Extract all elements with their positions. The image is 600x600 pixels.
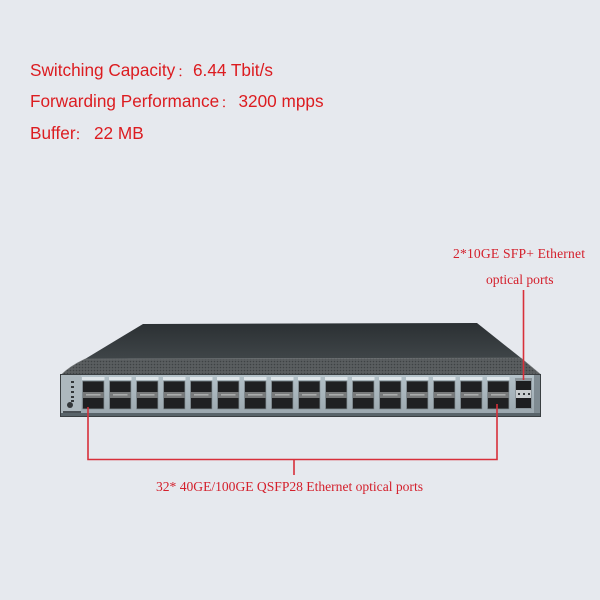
switch mesh vent strip — [61, 358, 540, 375]
spec: forwarding performance: Forwarding Performance — [30, 91, 219, 111]
right edge shading — [534, 375, 540, 416]
bracket line: QSFP28 ports leader — [88, 404, 497, 475]
callout: SFP+ ports label: 2*10GE SFP+ Ethernet — [453, 246, 585, 261]
callout: SFP+ ports label: optical ports — [486, 272, 554, 287]
bottom edge shading — [61, 413, 540, 416]
arrow line: SFP+ leader — [522, 290, 524, 380]
spec: buffer: 22 MB — [94, 123, 144, 143]
spec: forwarding performance: ： — [221, 96, 233, 110]
2 SFP+ ports — [515, 378, 532, 409]
specifications text block — [30, 60, 324, 143]
spec: buffer: ： — [75, 128, 87, 142]
spec: switching capacity: ： — [178, 65, 190, 79]
spec: forwarding performance: 3200 mpps — [238, 91, 324, 111]
network switch device — [60, 323, 540, 416]
callout: SFP+ ports label — [453, 246, 585, 287]
spec: buffer: Buffer — [30, 123, 76, 143]
switch front panel — [60, 374, 540, 416]
spec: switching capacity: 6.44 Tbit/s — [193, 60, 273, 80]
switch top plate — [85, 323, 521, 359]
callout: QSFP28 ports label: 32* 40GE/100GE QSFP28 Ethernet optical ports — [156, 479, 423, 494]
left status panel with LEDs — [61, 375, 81, 413]
spec: switching capacity: Switching Capacity — [30, 60, 175, 80]
32 QSFP28 ports in 16 cages — [82, 377, 510, 409]
